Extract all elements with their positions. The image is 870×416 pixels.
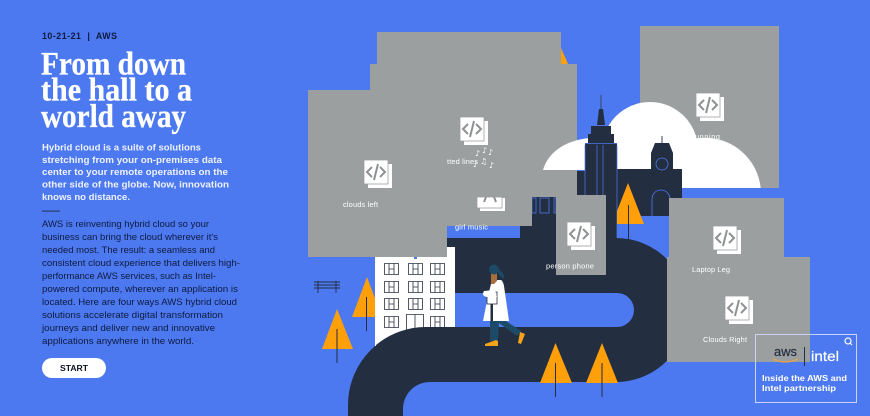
intro paragraph: stretching from your on-premises data (42, 155, 223, 166)
icon: music notes: ♪ (475, 149, 480, 158)
logo divider (804, 347, 805, 366)
body paragraph: performance AWS services, such as Intel- (42, 271, 216, 281)
orange tree behind top panels (555, 34, 568, 64)
tree: road right (586, 343, 618, 397)
empire state building (577, 95, 617, 240)
partnership badge (756, 334, 856, 402)
church building (617, 136, 682, 216)
body paragraph: AWS is reinventing hybrid cloud so your (42, 219, 209, 229)
icon: music notes: ♪ (473, 160, 478, 169)
tree: by building (352, 277, 382, 331)
placeholder panel: clouds left: clouds left (343, 200, 378, 209)
body paragraph: applications anywhere in the world. (42, 336, 194, 346)
placeholder panel: running: unning (695, 132, 720, 141)
placeholder panel: running (640, 26, 779, 188)
date and category: 10-21-21 | AWS (42, 31, 117, 41)
tree: road centre (540, 343, 572, 397)
icon: code dotted lines (460, 117, 488, 145)
icon: music notes: ♪ (482, 146, 487, 155)
title: world away (41, 99, 186, 135)
placeholder panel: clouds right (667, 257, 810, 362)
body paragraph (41, 219, 240, 346)
intro paragraph: center to your remote operations on the (42, 167, 228, 178)
start button (42, 358, 106, 378)
divider (42, 210, 60, 212)
tree: by church (617, 183, 644, 245)
icon: search refresh (845, 338, 852, 345)
aws logo: aws (774, 344, 797, 359)
icon: code laptop leg (713, 226, 741, 254)
person walking with tablet (483, 264, 525, 346)
left text column (41, 31, 240, 378)
intro paragraph: knows no distance. (42, 192, 130, 203)
start button: START (60, 363, 89, 373)
road over building base (376, 327, 455, 347)
laptop leg label: Laptop Leg (692, 265, 730, 274)
badge caption (762, 374, 847, 393)
white apartment building (375, 247, 455, 346)
icon: code girl music (477, 197, 505, 211)
body paragraph: consistent cloud experience that delivers high- (42, 258, 240, 268)
placeholder panel: dotted lines: tted lines (447, 157, 478, 166)
body paragraph: solutions accelerate digital transformation (42, 310, 223, 320)
intel logo: intel (811, 348, 839, 364)
badge caption: Inside the AWS and (762, 374, 847, 383)
body paragraph: journeys and deliver new and innovative (41, 323, 215, 333)
icon: code clouds right (725, 296, 753, 324)
body paragraph: located. Here are four ways AWS hybrid cloud (42, 297, 237, 307)
blue strip at road bend (447, 226, 520, 237)
tree: lower left (322, 309, 353, 363)
title (41, 46, 192, 135)
badge caption: Intel partnership (762, 384, 836, 393)
icon: music notes (473, 146, 494, 170)
dark block behind road (520, 197, 617, 242)
title: the hall to a (41, 72, 192, 108)
body paragraph: business can bring the cloud wherever it's (42, 232, 218, 242)
icon: code clouds left (364, 160, 392, 188)
placeholder panel: dotted lines (370, 64, 577, 197)
bench (314, 281, 340, 293)
placeholder panel: person phone (546, 195, 606, 275)
body paragraph: needed most. The result: a seamless and (42, 245, 215, 255)
placeholder panel: clouds right: Clouds Right (703, 335, 747, 344)
placeholder panel: girl music: girl music (455, 222, 488, 232)
icon: music notes: ♫ (480, 157, 487, 166)
icon: music notes: ♪ (488, 148, 493, 157)
intro paragraph: Hybrid cloud is a suite of solutions (42, 142, 201, 154)
intro paragraph: other side of the globe. Now, innovation (42, 180, 229, 191)
body paragraph: powered compute, wherever an application is (42, 284, 238, 294)
dark windows block (532, 198, 556, 213)
title: From down (41, 46, 186, 82)
placeholder panel: girl music (447, 197, 532, 232)
intro paragraph (42, 142, 229, 203)
icon: code top right (696, 93, 724, 121)
placeholder panel: clouds left (308, 90, 447, 257)
icon: code person phone (567, 222, 595, 250)
placeholder panel: laptop leg (669, 198, 784, 268)
placeholder panel: dotted lines upper (377, 32, 561, 72)
road (348, 238, 688, 416)
icon: music notes: ♪ (489, 161, 494, 170)
placeholder panel: person phone: person phone (546, 262, 594, 270)
clouds (543, 102, 761, 198)
